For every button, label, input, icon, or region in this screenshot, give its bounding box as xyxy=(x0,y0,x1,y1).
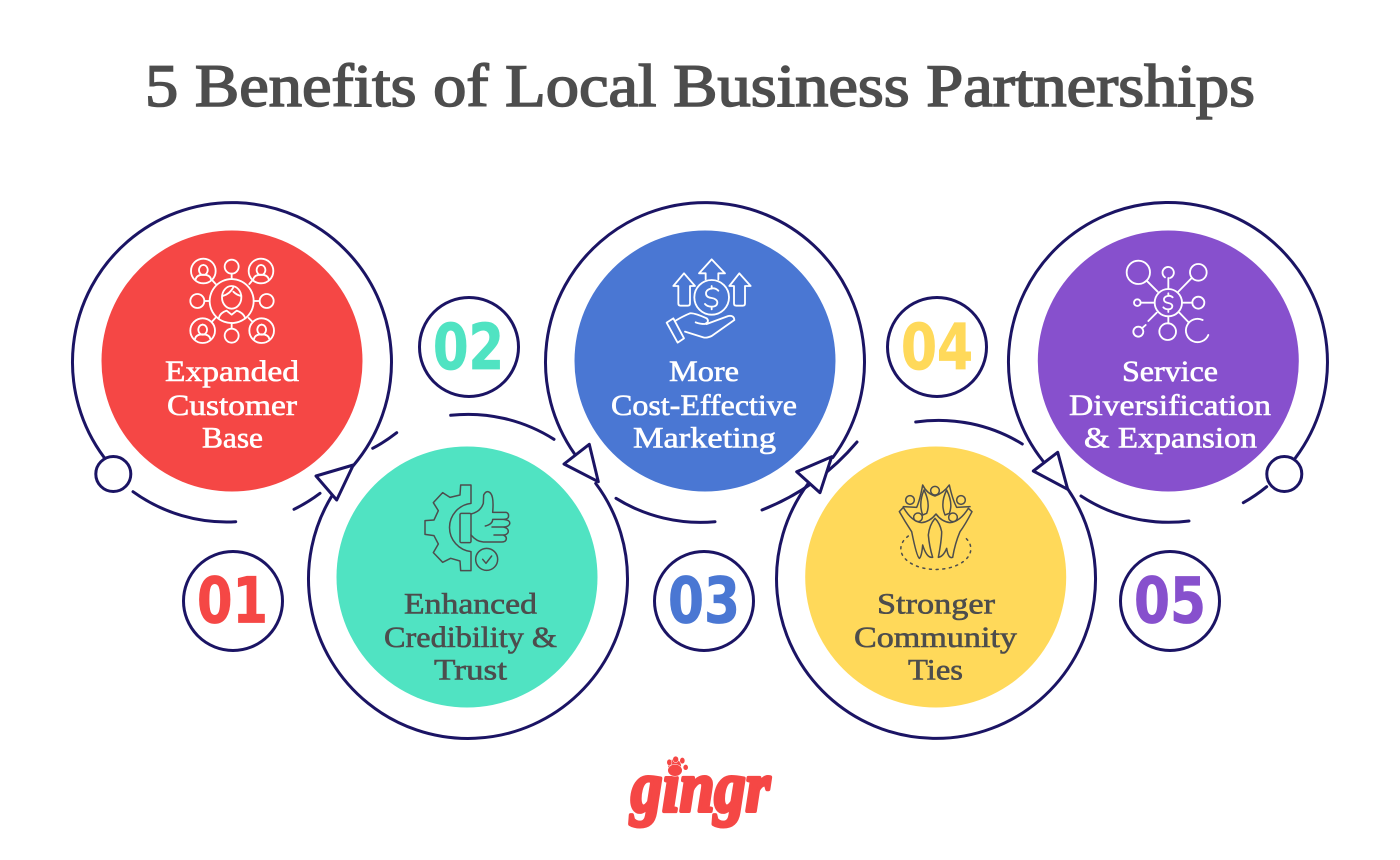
circle fill xyxy=(574,230,836,492)
icon: customer network xyxy=(190,259,274,343)
label: More Cost-Effective Marketing: More xyxy=(669,355,739,388)
icon: community group xyxy=(899,485,972,569)
badge 04: 04 xyxy=(901,311,973,384)
arrow: step 1 to 2 xyxy=(316,465,353,500)
panel: step 1 expanded customer base xyxy=(72,203,397,650)
label: Enhanced Credibility & Trust: Credibility & xyxy=(384,621,557,654)
label: Service Diversification & Expansion: Service xyxy=(1122,355,1218,388)
badge 01: 01 xyxy=(197,564,268,638)
badge 03: 03 xyxy=(668,564,740,638)
badge 02: 02 xyxy=(433,311,504,384)
badge 01 xyxy=(184,552,282,650)
circle fill xyxy=(805,446,1066,708)
label: Service Diversification & Expansion xyxy=(1069,355,1271,454)
label: More Cost-Effective Marketing: Marketing xyxy=(633,422,776,454)
ring 2 xyxy=(308,414,627,738)
label: Stronger Community Ties xyxy=(854,588,1017,686)
label: Enhanced Credibility & Trust xyxy=(384,588,557,686)
badge 05 xyxy=(1120,552,1220,650)
label: Stronger Community Ties: Community xyxy=(854,621,1017,654)
label: Expanded Customer Base: Base xyxy=(202,422,263,454)
panel: step 2 enhanced credibility and trust xyxy=(308,298,627,738)
label: Stronger Community Ties: Ties xyxy=(908,654,963,686)
panel: step 5 service diversification and expansion xyxy=(1008,203,1327,650)
label: Expanded Customer Base xyxy=(165,355,299,454)
label: More Cost-Effective Marketing xyxy=(611,355,797,454)
label: Enhanced Credibility & Trust: Enhanced xyxy=(404,588,537,620)
ring 1 xyxy=(72,203,397,522)
label: Expanded Customer Base: Expanded xyxy=(165,355,299,388)
arrow: step 2 to 3 xyxy=(564,444,598,482)
label: Expanded Customer Base: Customer xyxy=(167,389,297,422)
ring 3 xyxy=(545,203,864,522)
circle fill xyxy=(336,446,598,708)
icon: gear with thumbs up xyxy=(425,485,510,571)
arrow: step 4 to 5 xyxy=(1033,452,1068,489)
ring end dot xyxy=(1267,456,1302,492)
ring 5 xyxy=(1008,203,1327,522)
badge 05: 05 xyxy=(1134,564,1206,638)
icon: revenue diversification network xyxy=(1127,261,1208,342)
icon: money growth in hand xyxy=(667,259,751,343)
label: Service Diversification & Expansion: Diversification xyxy=(1069,389,1271,422)
logo wordmark: gingr xyxy=(629,747,771,827)
ring 4 xyxy=(777,420,1096,738)
panel: step 4 stronger community ties xyxy=(777,298,1096,738)
badge 02 xyxy=(420,298,518,396)
badge 03 xyxy=(654,552,754,650)
title: 5 Benefits of Local Business Partnerships xyxy=(145,53,1255,119)
circle fill xyxy=(1038,230,1299,492)
circle fill xyxy=(102,230,362,492)
badge 04 xyxy=(888,298,986,396)
logo paw xyxy=(667,756,688,776)
label: Enhanced Credibility & Trust: Trust xyxy=(434,654,508,686)
logo: gingr xyxy=(629,747,771,827)
ring start dot xyxy=(96,456,131,492)
label: Stronger Community Ties: Stronger xyxy=(877,588,995,620)
arrow: step 3 to 4 xyxy=(797,457,832,493)
panel: step 3 more cost-effective marketing xyxy=(545,203,864,650)
label: Service Diversification & Expansion: & Expansion xyxy=(1084,422,1257,454)
label: More Cost-Effective Marketing: Cost-Effective xyxy=(611,389,797,422)
